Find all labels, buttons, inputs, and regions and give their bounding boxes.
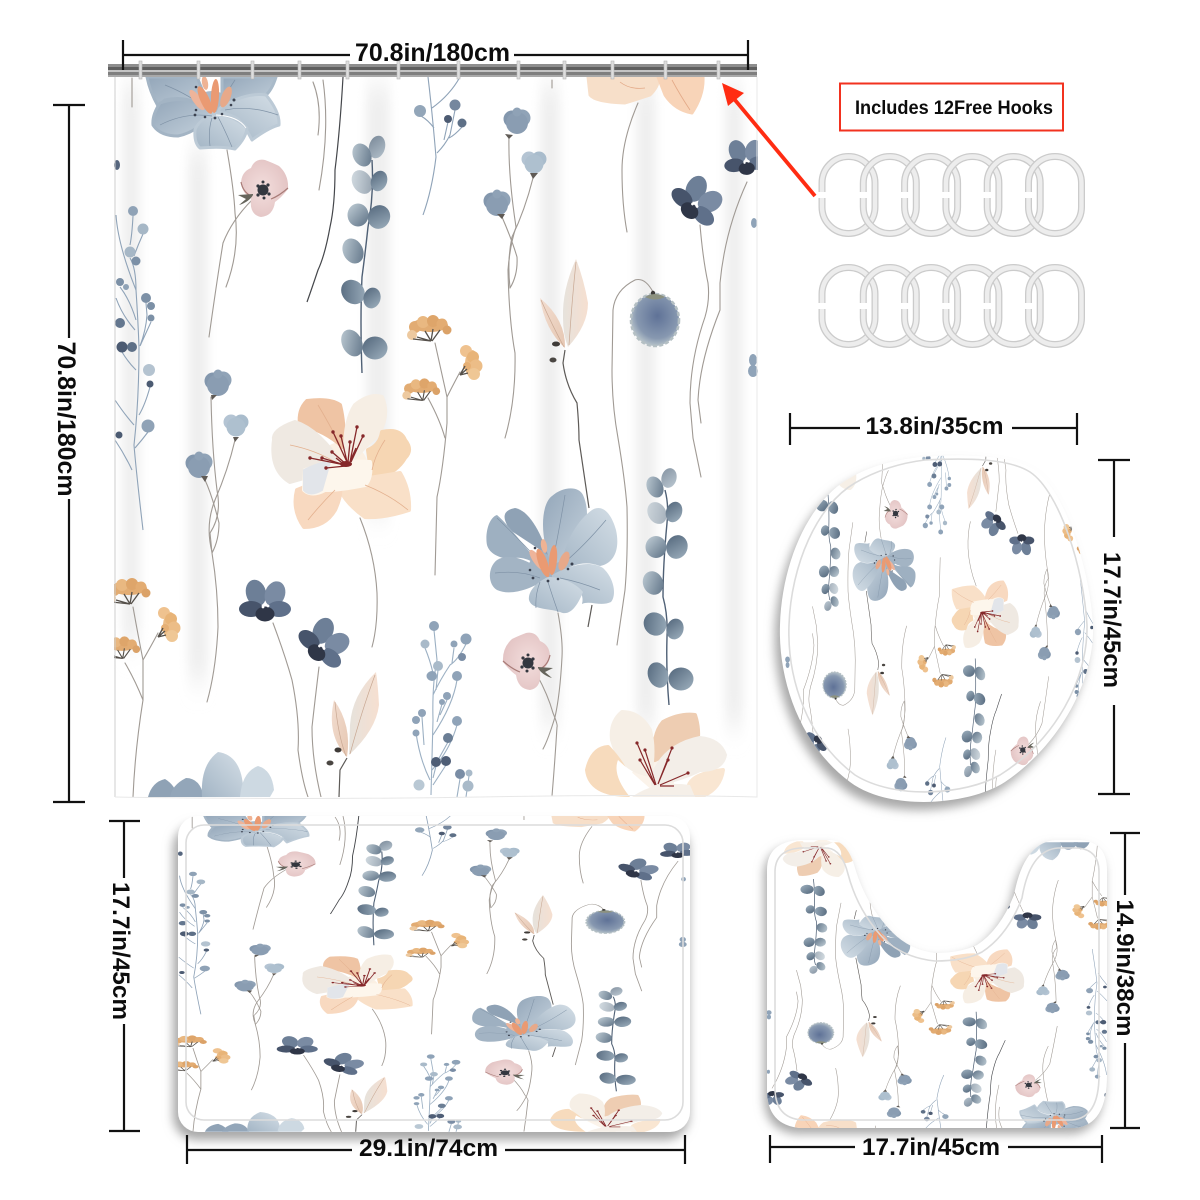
dimension: lid height bbox=[1098, 460, 1130, 794]
dimension: mat width bbox=[187, 1135, 685, 1164]
shower rod with hooks bbox=[108, 61, 757, 79]
dimension: lid width: 13.8in/35cm bbox=[866, 413, 1004, 440]
panel: toilet lid cover bbox=[775, 443, 1100, 810]
dimension: curtain height: 70.8in/180cm bbox=[52, 342, 80, 496]
dimension: lid height: 17.7in/45cm bbox=[1098, 552, 1125, 688]
panel: shower curtain bbox=[102, 76, 769, 804]
arrow: points to hook on rod bbox=[722, 83, 815, 196]
panel: bath mat bbox=[169, 814, 696, 1140]
icon: row two of hook rings bbox=[822, 268, 1082, 344]
dimension: mat height: 17.7in/45cm bbox=[107, 882, 134, 1020]
dimension: curtain height bbox=[52, 105, 85, 802]
dimension: lid width bbox=[790, 413, 1077, 445]
dimension: contour mat height: 14.9in/38cm bbox=[1111, 900, 1138, 1036]
dimension: curtain width: 70.8in/180cm bbox=[355, 39, 510, 67]
callout: includes 12 free hooks bbox=[840, 84, 1063, 130]
dimension: contour mat width: 17.7in/45cm bbox=[862, 1134, 1000, 1161]
callout: includes 12 free hooks: Includes 12Free Hooks bbox=[855, 98, 1053, 119]
dimension: contour mat height bbox=[1110, 833, 1140, 1128]
dimension: curtain width bbox=[123, 39, 748, 70]
panel: contour mat bbox=[760, 839, 1114, 1134]
dimension: contour mat width bbox=[770, 1134, 1102, 1163]
dimension: mat width: 29.1in/74cm bbox=[359, 1135, 498, 1162]
curtain floral pattern bbox=[102, 76, 769, 804]
dimension: mat height bbox=[107, 821, 140, 1131]
icon: row one of hook rings bbox=[822, 156, 1082, 234]
